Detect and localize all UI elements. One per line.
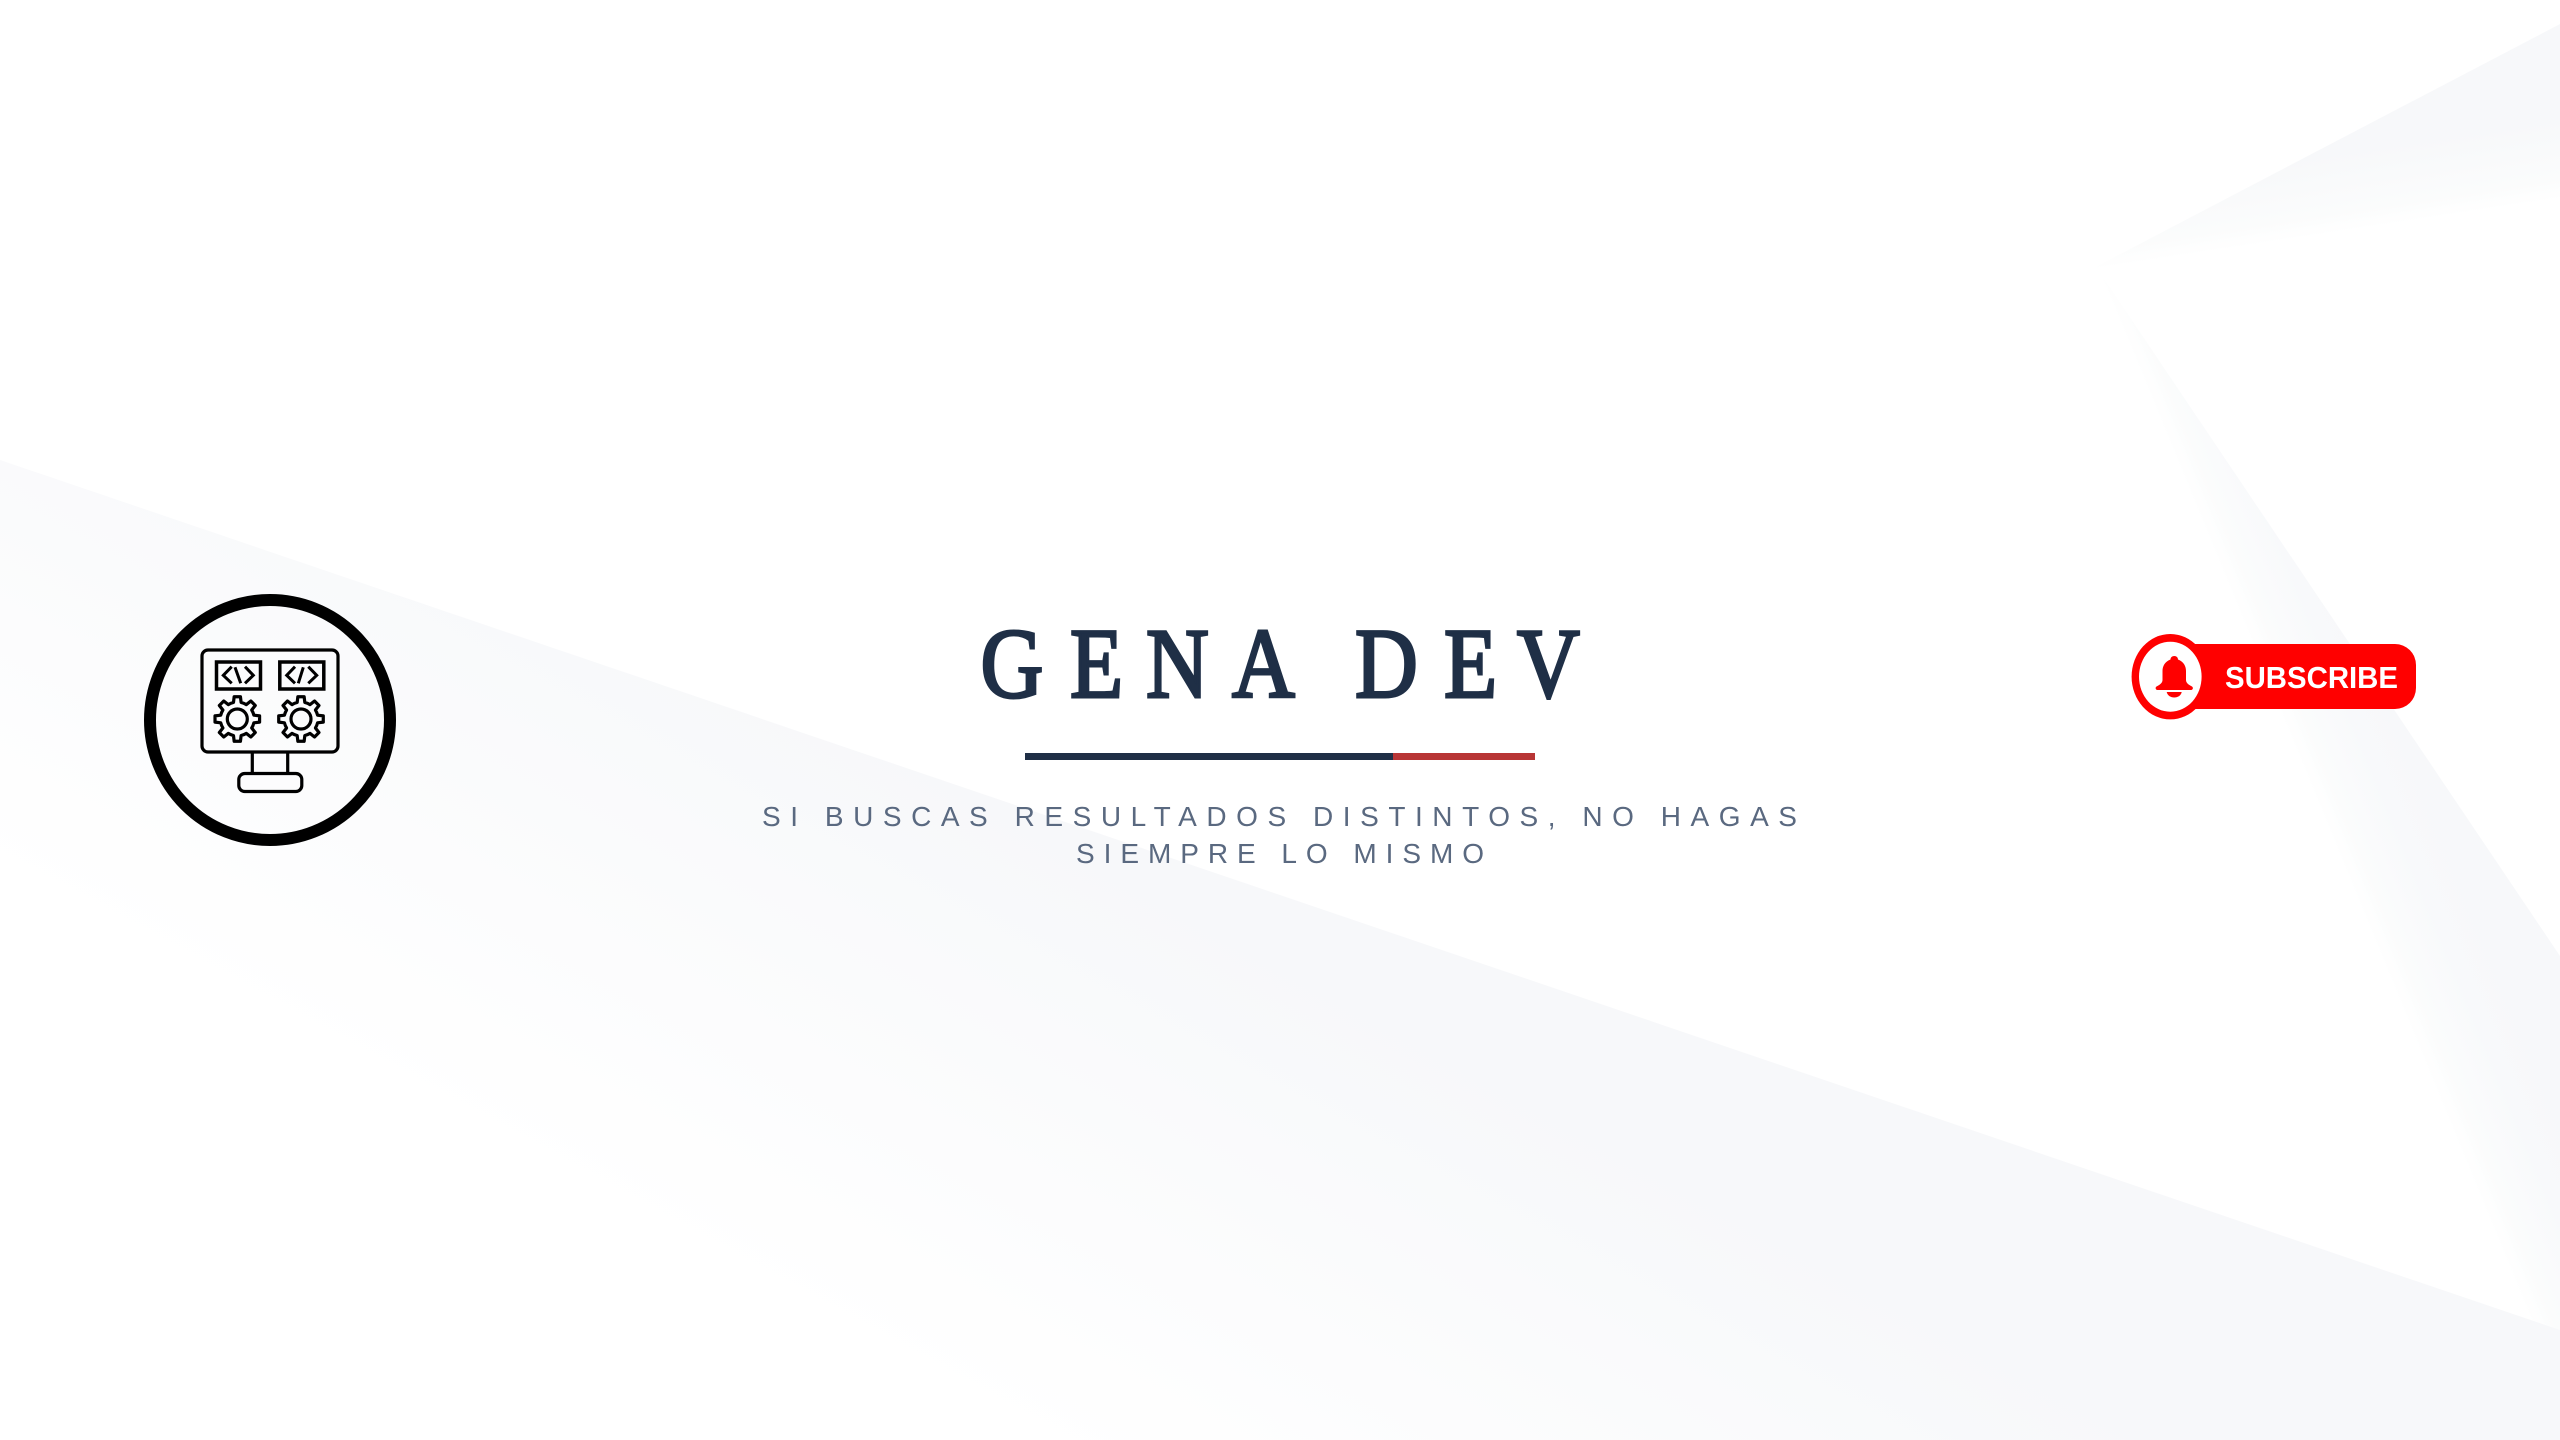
subtitle: SIEMPRE LO MISMO (1076, 838, 1484, 869)
icon: bell (2156, 656, 2193, 698)
bell badge center (2139, 642, 2202, 712)
background: large diagonal shape (0, 460, 2560, 1440)
code window left (216, 662, 260, 689)
button label: SUBSCRIBE (2225, 660, 2398, 695)
subtitle (762, 801, 1797, 869)
subscribe button (2132, 634, 2416, 719)
code window right (280, 662, 324, 689)
logo ring (150, 600, 390, 840)
gear left (215, 697, 260, 741)
divider bar (1025, 753, 1535, 760)
subtitle: SI BUSCAS RESULTADOS DISTINTOS, NO HAGAS (762, 801, 1797, 832)
title: GENA DEV (980, 608, 1580, 719)
monitor screen (202, 650, 338, 752)
gear right (279, 697, 323, 741)
logo: monitor with code and gears (150, 600, 390, 840)
monitor stand (252, 753, 288, 773)
bell badge ring (2132, 634, 2209, 719)
background: upper right facet (2090, 24, 2560, 270)
monitor base (239, 774, 302, 792)
button pill (2170, 644, 2416, 709)
background: right side facet (2000, 270, 2560, 1440)
